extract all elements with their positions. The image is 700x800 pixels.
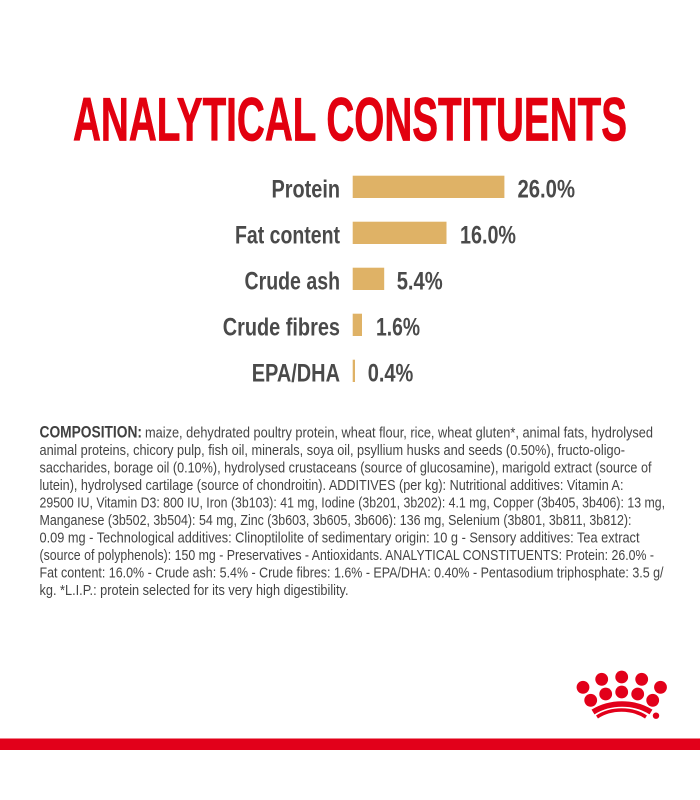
row: crude ash: 5.4% bbox=[397, 269, 443, 296]
bar chart: analytical constituents bbox=[223, 176, 575, 388]
row: fat content bbox=[235, 222, 516, 250]
row: protein: Protein bbox=[272, 176, 340, 204]
row: crude ash bbox=[244, 268, 443, 296]
composition text block: kg. *L.I.P.: protein selected for its very high digestibility. bbox=[40, 582, 348, 599]
row: protein: 26.0% bbox=[518, 176, 575, 204]
row: crude fibres: 1.6% bbox=[376, 315, 420, 342]
row: EPA/DHA bbox=[252, 360, 413, 388]
icon: royal canin crown logo bbox=[577, 671, 667, 719]
row: EPA/DHA: 0.4% bbox=[368, 361, 413, 388]
composition text block bbox=[40, 424, 665, 599]
composition text block: COMPOSITION: bbox=[40, 424, 142, 442]
row: fat content: 16.0% bbox=[460, 222, 516, 250]
bottom red band bbox=[0, 738, 700, 750]
row: EPA/DHA: EPA/DHA bbox=[252, 361, 340, 388]
row: protein bbox=[272, 176, 575, 204]
row: crude ash: Crude ash bbox=[244, 269, 340, 296]
row: crude fibres: Crude fibres bbox=[223, 315, 340, 342]
row: fat content: Fat content bbox=[235, 222, 340, 250]
